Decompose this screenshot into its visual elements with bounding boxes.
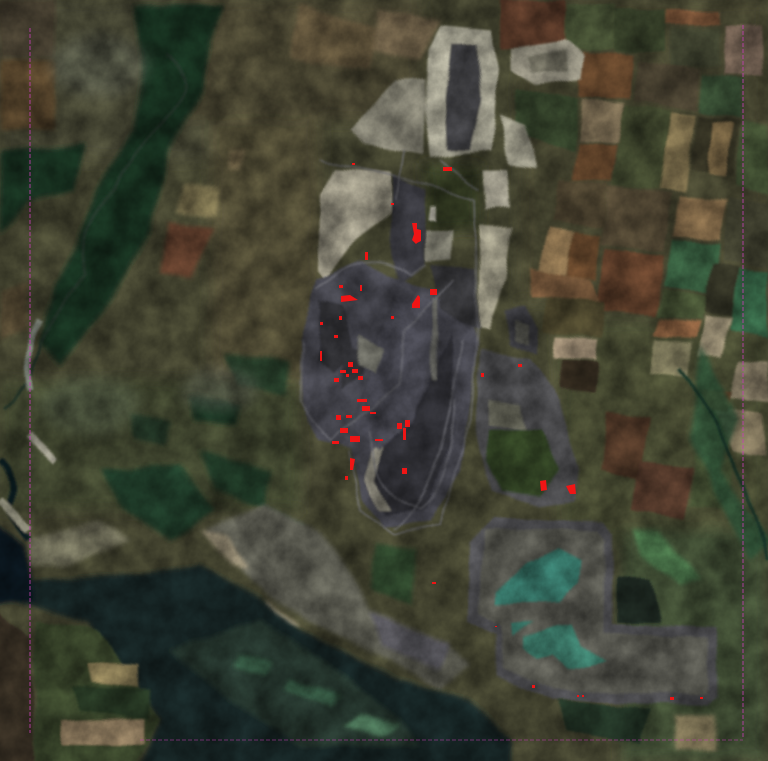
white tailings dumps around the main pit [318, 168, 512, 330]
meandering rivers [0, 55, 768, 560]
main open pit [300, 175, 480, 528]
city [30, 505, 470, 690]
south-east spoil heap [475, 305, 580, 505]
tailings pond embankment [468, 518, 718, 705]
upper spoil dump and quarry [350, 25, 585, 168]
turquoise pond lower [512, 622, 608, 667]
pit haul roads [300, 150, 478, 535]
green meadow [632, 345, 768, 750]
turquoise pond upper [495, 548, 582, 603]
southern bank fields [0, 605, 160, 761]
forest inside bend of pond [560, 578, 660, 745]
forest along river valley [0, 5, 415, 605]
farmland fields, west [0, 0, 440, 340]
town, north-west [40, 35, 258, 435]
river Dnieper [0, 520, 510, 761]
red detected change markers [320, 163, 703, 700]
farmland fields, north-east [500, 0, 768, 520]
